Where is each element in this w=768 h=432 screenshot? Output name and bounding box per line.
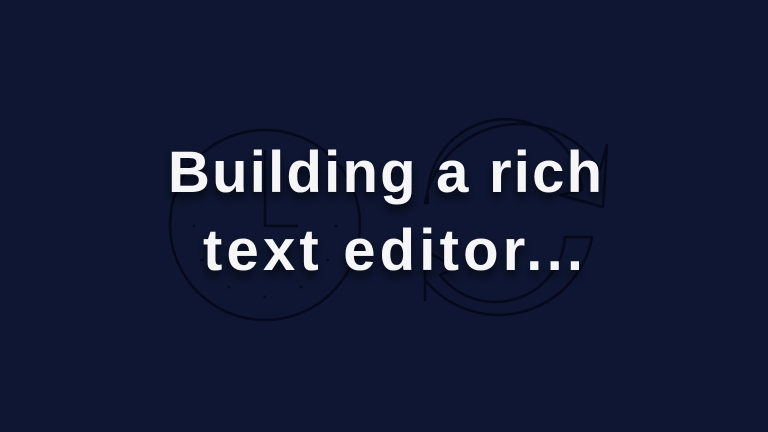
title	[168, 140, 602, 283]
title: Building a rich	[168, 140, 602, 205]
icon: sync arrows	[425, 119, 607, 315]
icon: clock outline	[170, 130, 360, 320]
title: text editor...	[203, 218, 583, 283]
